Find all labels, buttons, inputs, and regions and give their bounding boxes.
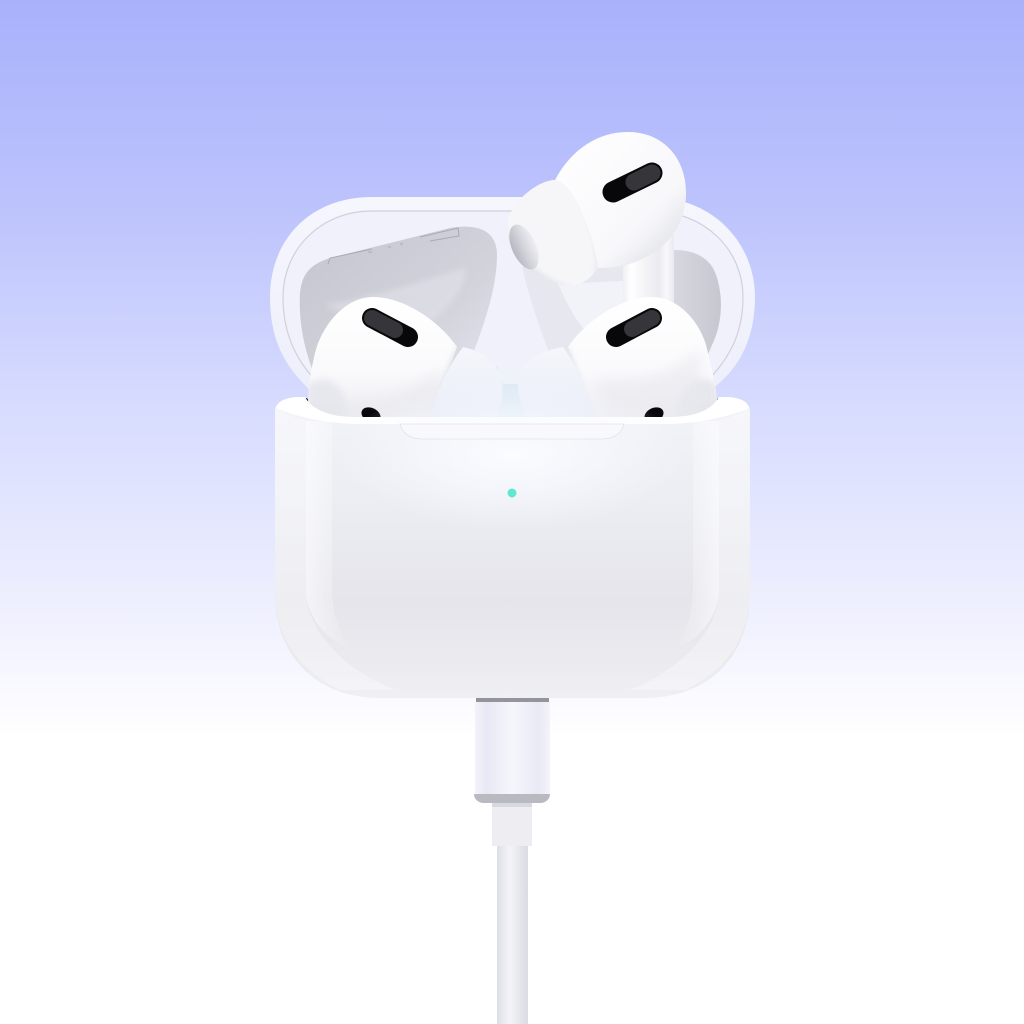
vent bbox=[642, 404, 666, 426]
left highlight bbox=[306, 430, 326, 630]
case lid, open bbox=[270, 197, 755, 405]
vent bbox=[359, 404, 383, 426]
top lip bbox=[275, 397, 750, 424]
stem bbox=[623, 235, 674, 310]
engraved well details bbox=[328, 228, 459, 264]
right highlight bbox=[699, 431, 719, 630]
eartip bbox=[508, 180, 597, 286]
charging cable bbox=[492, 803, 532, 1024]
eartip bbox=[518, 347, 594, 417]
lid inner left well bbox=[300, 227, 497, 405]
lid inner right well bbox=[660, 250, 721, 395]
pale contour below lifted earbud bbox=[558, 280, 640, 335]
lifted earbud bbox=[508, 132, 686, 303]
right edge band bbox=[712, 574, 750, 622]
eartip bbox=[430, 347, 502, 417]
lid inner centre scoop bbox=[522, 250, 720, 400]
head bbox=[555, 132, 686, 268]
speaker grille bbox=[613, 173, 652, 192]
nozzle bbox=[503, 220, 545, 274]
hinge lip bbox=[400, 424, 624, 439]
glow around status light bbox=[342, 380, 682, 530]
dark gaps at case edges bbox=[303, 398, 722, 410]
charging case body bbox=[275, 380, 750, 698]
left earbud bbox=[305, 297, 502, 426]
well soft contour bbox=[325, 268, 466, 325]
status light bbox=[508, 488, 516, 498]
charging connector bbox=[474, 698, 550, 803]
speaker grille bbox=[616, 318, 652, 337]
right earbud bbox=[518, 297, 720, 426]
speaker grille bbox=[372, 318, 408, 337]
left edge band bbox=[275, 574, 312, 622]
inside of case between earbuds bbox=[490, 366, 535, 417]
